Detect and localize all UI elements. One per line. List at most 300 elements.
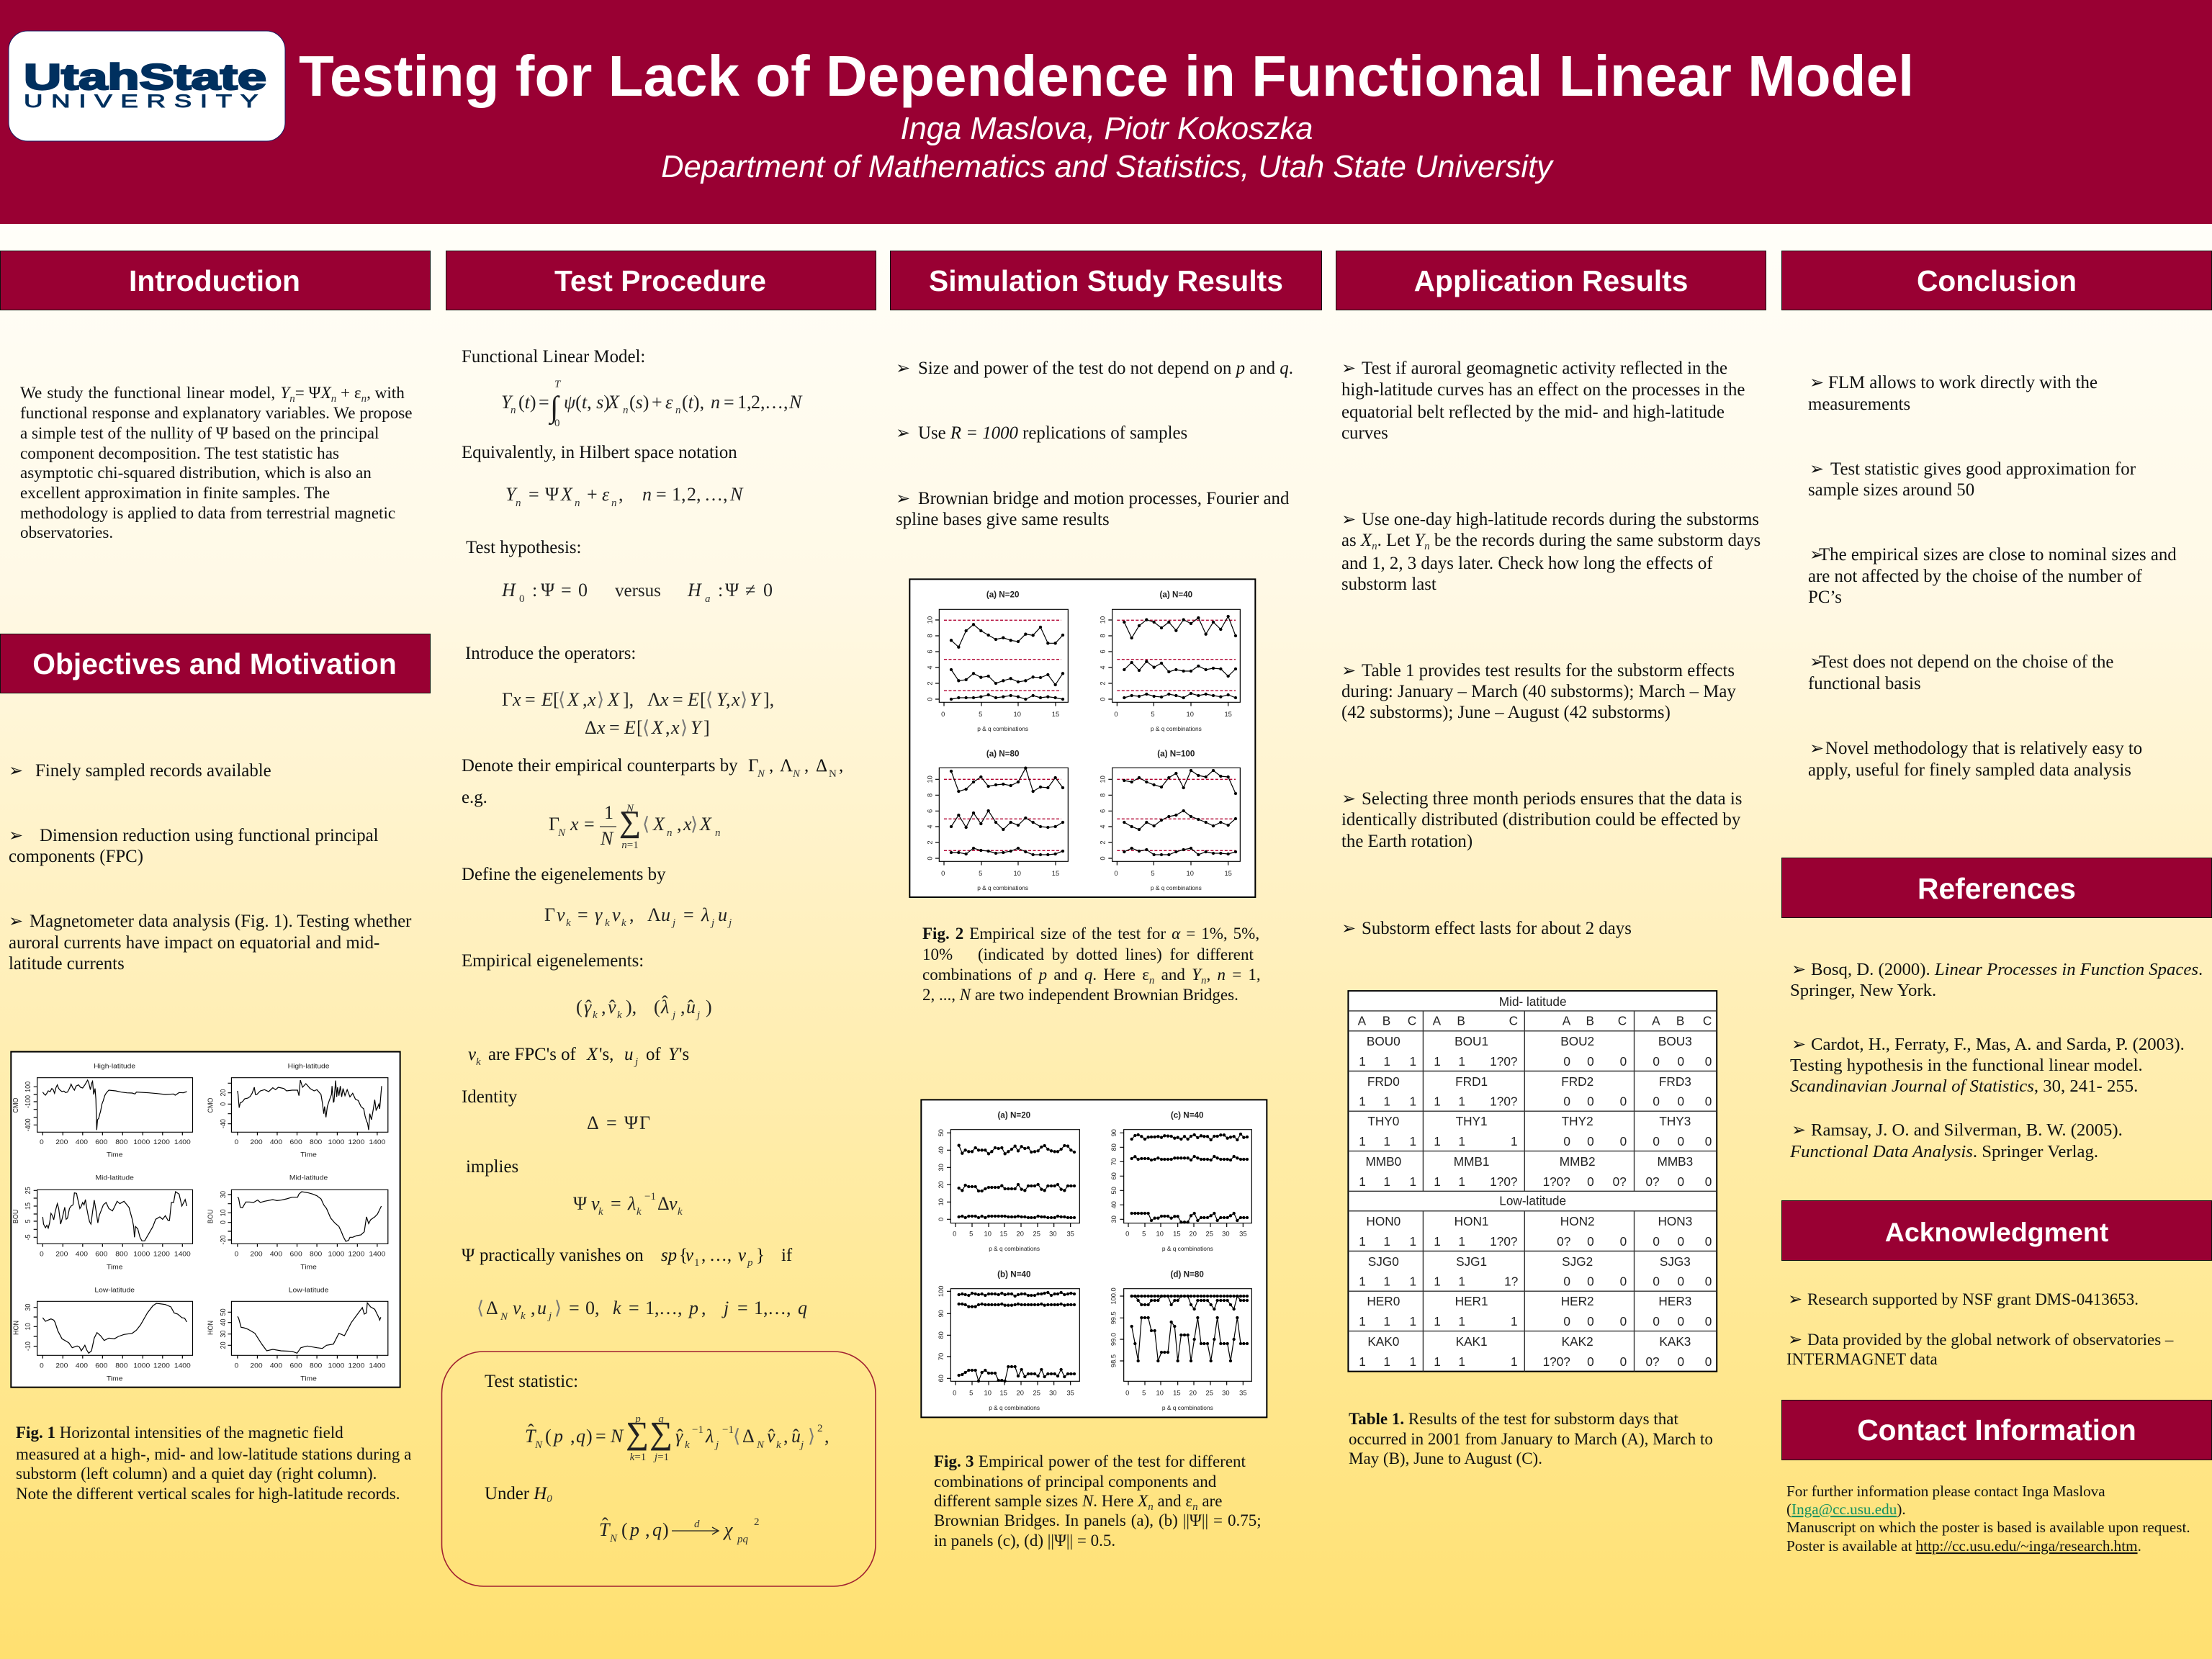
bullet list: application findings: the Earth rotation) xyxy=(1341,832,1473,851)
formula: integral model: ( xyxy=(682,392,688,413)
text: empirical counterparts: N xyxy=(829,768,837,780)
text: FPC definition: u xyxy=(624,1045,633,1064)
plot: high-latitude quiet day: -40 xyxy=(219,1119,228,1128)
plot: d N=80: 5 xyxy=(1142,1390,1146,1397)
formula: empirical eigenelements: λ xyxy=(660,997,669,1017)
formula: operators: , xyxy=(665,717,670,738)
bullet list: conclusions: ➢ xyxy=(1809,372,1824,392)
table 1: test results: MMB0 xyxy=(1365,1154,1401,1169)
formula: hypotheses: Ψ xyxy=(725,580,739,601)
table 1: test results: KAK3 xyxy=(1659,1334,1691,1349)
formula: eigen equations: = xyxy=(683,904,694,925)
text: e.g.: e.g. xyxy=(462,788,487,807)
table 1: test results: 1 xyxy=(1458,1174,1465,1189)
heading: References: References xyxy=(1917,872,2076,905)
text: implies: implies xyxy=(466,1157,518,1177)
formula: identity: Γ xyxy=(639,1112,650,1133)
plot: N=20: 10 xyxy=(926,616,933,624)
plot: N=100: 5 xyxy=(1151,870,1155,877)
formula: empirical covariance: N xyxy=(600,828,614,849)
plot: high-latitude substorm: 1200 xyxy=(153,1139,170,1146)
plot: N=40: 5 xyxy=(1151,711,1155,718)
plot: high-latitude quiet day xyxy=(207,1063,388,1159)
formula: inner product zero: …, xyxy=(768,1298,791,1318)
logo: Utah State University: UNIVERSITY xyxy=(24,91,266,112)
bullet list: application findings: ➢ xyxy=(1341,788,1356,809)
table 1: test results: FRD0 xyxy=(1367,1074,1400,1089)
table 1: test results: HER2 xyxy=(1561,1294,1594,1308)
plot: mid-latitude quiet day: 0 xyxy=(219,1220,228,1224)
plot: N=40: 8 xyxy=(1099,634,1106,638)
text: empirical counterparts: , xyxy=(769,756,773,775)
table 1: test results: SJG3 xyxy=(1660,1254,1691,1269)
formula: limit distribution: ˆ xyxy=(602,1514,608,1535)
plot: low-latitude quiet day: 800 xyxy=(310,1362,322,1370)
text: vanishing condition: practically vanishes on xyxy=(480,1246,644,1265)
caption: figure 3: and ε xyxy=(1154,1492,1192,1510)
plot: high-latitude quiet day: 20 xyxy=(219,1089,228,1097)
plot: high-latitude quiet day: 1200 xyxy=(348,1139,364,1146)
figure 1: magnetic field curves xyxy=(11,1052,400,1388)
formula: empirical eigenelements: ˆ xyxy=(688,997,694,1017)
plot: high-latitude quiet day: 1000 xyxy=(328,1139,344,1146)
formula: operator model: …, xyxy=(704,484,727,505)
plot: N=20: 0 xyxy=(926,697,933,701)
formula: operators: ⟩ xyxy=(597,689,604,710)
table 1: test results: 1 xyxy=(1434,1174,1441,1189)
formula: empirical eigenelements: u xyxy=(686,997,696,1017)
formula: inner product zero: , xyxy=(701,1298,706,1318)
formula: operator model: 2, xyxy=(687,484,701,505)
formula: operator model: n xyxy=(516,498,521,509)
formula: hypotheses: 0 xyxy=(763,580,773,601)
text: FPC definition: v xyxy=(468,1045,477,1064)
bullet list: simulation findings: Brownian bridge and motion processes, Fourier and xyxy=(918,489,1290,508)
plot: high-latitude quiet day: High-latitude xyxy=(288,1063,330,1070)
heading: Application Results xyxy=(1336,251,1766,310)
plot: low-latitude substorm: 800 xyxy=(115,1362,127,1370)
bullet list: objectives: latitude currents xyxy=(9,954,125,974)
table 1: test results: 1 xyxy=(1359,1054,1366,1069)
bullet list: conclusions: ➢ xyxy=(1809,459,1824,479)
bullet list: application findings: curves xyxy=(1341,423,1388,443)
formula: operators: ], xyxy=(763,689,774,710)
plot: mid-latitude substorm: 200 xyxy=(55,1251,68,1258)
logo: Utah State University: UtahState xyxy=(24,57,266,97)
plot: c N=40: (c) N=40 xyxy=(1171,1111,1204,1120)
bullet list: conclusions: sample sizes around 50 xyxy=(1808,480,1974,500)
caption: figure 2: n xyxy=(1201,975,1206,986)
formula: empirical covariance xyxy=(549,802,720,851)
heading: Objectives and Motivation xyxy=(0,634,431,693)
table 1: test results: FRD3 xyxy=(1659,1074,1691,1089)
table 1: test results: 0 xyxy=(1620,1134,1627,1148)
text: empirical counterparts: , xyxy=(804,756,809,775)
formula: empirical eigenelements: ( xyxy=(654,997,660,1017)
text: vanishing condition: , xyxy=(701,1246,706,1265)
text: introduction paragraph: = Ψ xyxy=(295,384,322,403)
formula: test statistic: −1 xyxy=(692,1424,703,1436)
formula: empirical covariance: ⟩ xyxy=(691,814,698,835)
plot: N=40: 15 xyxy=(1224,711,1232,718)
formula: empirical eigenelements: ) xyxy=(706,997,712,1017)
bullet list: objectives: Finely sampled records available xyxy=(35,761,271,781)
plot: N=20: 0 xyxy=(941,711,945,718)
formula: test statistic: ˆ xyxy=(768,1426,775,1447)
panel: Acknowledgment xyxy=(1781,1201,2212,1368)
text: empirical counterparts: N xyxy=(757,768,765,780)
formula: empirical eigenelements: , xyxy=(680,997,685,1017)
formula: test statistic: ⟩ xyxy=(808,1426,815,1447)
formula: operators: x xyxy=(731,689,740,710)
plot: a N=20: 0 xyxy=(953,1231,956,1238)
plot: c N=40: 30 xyxy=(1110,1215,1118,1223)
formula: test statistic: −1 xyxy=(722,1424,734,1436)
formula: inner product zero: k xyxy=(521,1310,526,1322)
formula: test statistic: j=1 xyxy=(653,1452,669,1463)
text: introduction paragraph: functional response and explanatory variables. We propose xyxy=(20,404,413,423)
caption: table 1: May (B), June to August (C). xyxy=(1349,1449,1542,1467)
text: contact details: http://cc.usu.edu/~inga/research.htm. xyxy=(1916,1537,2141,1555)
plot: mid-latitude substorm: -5 xyxy=(24,1234,32,1240)
table 1: test results: THY0 xyxy=(1367,1114,1400,1128)
caption: figure 2: n = 1, xyxy=(1217,966,1261,984)
text: introduction paragraph: We study the functional linear model, xyxy=(20,384,280,403)
bullet list: application findings: Selecting three month periods ensures that the data is xyxy=(1362,789,1742,809)
caption: figure 1: Horizontal intensities of the magnetic field xyxy=(60,1424,343,1442)
plot: b N=40: 0 xyxy=(953,1390,956,1397)
table 1: test results: SJG0 xyxy=(1368,1254,1399,1269)
table 1: test results: 0 xyxy=(1678,1134,1684,1148)
bullet list: acknowledgments: Data provided by the global network of observatories – xyxy=(1807,1331,2174,1349)
plot: low-latitude quiet day: 40 xyxy=(219,1319,228,1326)
plot: mid-latitude substorm: Time xyxy=(107,1264,122,1271)
text: under H0: 0 xyxy=(547,1493,552,1505)
table 1: test results: Low-latitude xyxy=(1499,1193,1566,1208)
plot: N=40: p & q combinations xyxy=(1151,725,1202,732)
plot: c N=40: 20 xyxy=(1190,1231,1197,1238)
table 1: test results: 0? xyxy=(1645,1354,1660,1369)
caption: figure 3: different sample sizes xyxy=(934,1492,1082,1510)
formula: operators: Y xyxy=(716,689,729,710)
table 1: test results: 0 xyxy=(1705,1354,1712,1369)
formula: test statistic: , xyxy=(783,1426,788,1447)
plot: N=20: 6 xyxy=(926,649,933,654)
formula: hypotheses: H xyxy=(687,580,702,601)
plot: high-latitude substorm: -400 xyxy=(24,1118,32,1131)
formula: operators: Λ xyxy=(647,689,661,710)
table 1: test results: 1 xyxy=(1383,1054,1390,1069)
bullet list: objectives: Dimension reduction using functional principal xyxy=(40,826,379,845)
plot: a N=20: (a) N=20 xyxy=(997,1111,1030,1120)
plot: N=20: 4 xyxy=(926,665,933,670)
plot: c N=40: 35 xyxy=(1239,1231,1247,1238)
table 1: test results: 0 xyxy=(1705,1234,1712,1249)
text: vanishing condition: Ψ xyxy=(462,1246,475,1265)
formula: implied relation: k xyxy=(598,1206,603,1218)
formula: empirical eigenelements: ˆ xyxy=(662,992,668,1013)
plot: d N=80: 99.5 xyxy=(1110,1311,1117,1324)
formula: operators: = xyxy=(609,717,620,738)
panel: Test Procedure xyxy=(442,251,876,1586)
caption: table 1: occurred in 2001 from January to March (A), March to xyxy=(1349,1430,1713,1448)
formula: limit distribution: , xyxy=(645,1519,649,1540)
formula: empirical eigenelements: ), xyxy=(626,997,637,1017)
bullet list: application findings: ➢ xyxy=(1341,660,1356,680)
table 1: test results: 0 xyxy=(1653,1274,1660,1289)
text: under H0: Under xyxy=(485,1484,534,1503)
formula: test statistic: = xyxy=(595,1426,606,1447)
formula: hypotheses: a xyxy=(705,593,710,605)
panel: Conclusion xyxy=(1781,251,2212,780)
formula: hypotheses: : xyxy=(718,580,723,601)
plot: low-latitude substorm: 1400 xyxy=(174,1362,191,1370)
table 1: test results: 0 xyxy=(1653,1234,1660,1249)
plot: N=40: 6 xyxy=(1099,649,1106,654)
table 1: test results: 0 xyxy=(1678,1174,1684,1189)
table 1: test results: 1 xyxy=(1383,1134,1390,1148)
table 1: test results: C xyxy=(1509,1013,1518,1028)
bullet list: application findings: as xyxy=(1341,531,1361,550)
plot: mid-latitude quiet day: BOU xyxy=(207,1210,215,1223)
plot: c N=40: p & q combinations xyxy=(1162,1245,1213,1252)
plot: c N=40: 0 xyxy=(1125,1231,1129,1238)
table 1: test results: 1 xyxy=(1359,1274,1366,1289)
caption: figure 3: n xyxy=(1192,1501,1198,1513)
caption: figure 1: Note the different vertical scales for high-latitude records. xyxy=(16,1485,400,1503)
table 1: test results: FRD2 xyxy=(1561,1074,1593,1089)
formula: operators: Δ xyxy=(585,717,597,738)
plot: N=20: 5 xyxy=(979,711,982,718)
text: empirical counterparts: Λ xyxy=(780,756,793,775)
formula: eigen equations: u xyxy=(718,904,727,925)
table 1: test results: 1 xyxy=(1434,1314,1441,1328)
formula: hypotheses: 0 xyxy=(519,593,524,605)
table 1: test results: 1?0? xyxy=(1490,1174,1518,1189)
formula: empirical eigenelements: ( xyxy=(576,997,583,1017)
table 1: test results: 1 xyxy=(1359,1094,1366,1109)
table 1: test results: HON0 xyxy=(1366,1214,1401,1228)
plot: N=80 xyxy=(926,749,1068,891)
text: empirical counterparts: N xyxy=(792,768,801,780)
table 1: test results: 1 xyxy=(1359,1354,1366,1369)
formula: test statistic: γ xyxy=(675,1426,683,1447)
heading: Simulation Study Results xyxy=(890,251,1322,310)
caption: figure 2: n xyxy=(1149,975,1154,986)
text: test hypothesis: Test hypothesis: xyxy=(466,538,581,557)
plot: mid-latitude quiet day: Time xyxy=(300,1264,317,1271)
table 1: test results: BOU3 xyxy=(1658,1034,1692,1048)
formula: test statistic: ( xyxy=(545,1426,552,1447)
plot: c N=40: 70 xyxy=(1110,1158,1118,1166)
plot: N=80: 10 xyxy=(1014,870,1021,877)
caption: figure 3: N. Here X xyxy=(1082,1492,1148,1510)
formula: integral model: X xyxy=(607,392,620,413)
formula: operator model: Ψ xyxy=(545,484,559,505)
table 1: test results: 0 xyxy=(1678,1234,1684,1249)
plot: high-latitude quiet day: 400 xyxy=(270,1139,282,1146)
plot: N=20 xyxy=(926,590,1068,732)
formula: empirical covariance: ∑ xyxy=(619,806,641,839)
plot: low-latitude quiet day: 20 xyxy=(219,1341,228,1349)
formula: empirical covariance: = xyxy=(584,814,595,835)
table 1: test results: 0 xyxy=(1620,1274,1627,1289)
plot: low-latitude quiet day: 400 xyxy=(270,1362,282,1370)
plot: b N=40: 90 xyxy=(938,1310,945,1318)
table 1: test results: BOU1 xyxy=(1455,1034,1488,1048)
plot: mid-latitude substorm: 1000 xyxy=(133,1251,150,1258)
reference list: Ramsay, J. O. and Silverman, B. W. (2005). xyxy=(1811,1120,2123,1140)
formula: test statistic: k xyxy=(685,1439,690,1451)
formula: test statistic: q xyxy=(576,1426,585,1447)
table 1: test results: A xyxy=(1433,1013,1441,1028)
formula: operators: x xyxy=(512,689,521,710)
heading: Contact Information: Contact Information xyxy=(1857,1413,2136,1447)
text: introduction paragraph: component decomposition. The test statistic has xyxy=(20,444,339,463)
formula: inner product zero: , xyxy=(531,1298,536,1318)
plot: mid-latitude substorm: 800 xyxy=(115,1251,127,1258)
table 1: test results: 0 xyxy=(1705,1094,1712,1109)
table 1: test results: A xyxy=(1652,1013,1660,1028)
plot: d N=80: 25 xyxy=(1206,1390,1213,1397)
formula: integral model: n xyxy=(675,405,681,416)
plot: low-latitude substorm: 600 xyxy=(95,1362,108,1370)
formula: operator model: n xyxy=(575,498,580,509)
formula: operator model: X xyxy=(560,484,573,505)
plot: d N=80: 30 xyxy=(1222,1390,1230,1397)
table 1: test results: B xyxy=(1457,1013,1465,1028)
plot: a N=20: 0 xyxy=(938,1218,945,1221)
plot: mid-latitude quiet day: 1200 xyxy=(348,1251,364,1258)
text: vanishing condition: v xyxy=(738,1246,747,1265)
plot: high-latitude substorm: 600 xyxy=(95,1139,108,1146)
formula: limit distribution: χ xyxy=(722,1519,733,1540)
plot: d N=80: 98.5 xyxy=(1110,1354,1117,1367)
text: introduction paragraph: asymptotic chi-squared distribution, which is also an xyxy=(20,464,372,482)
formula: test statistic: , xyxy=(824,1426,830,1447)
formula: empirical eigenelements: j xyxy=(671,1010,675,1021)
reference list: Bosq, D. (2000). xyxy=(1811,960,1935,979)
table 1: test results: 1 xyxy=(1410,1314,1416,1328)
plot: N=40: 4 xyxy=(1099,665,1106,670)
plot: b N=40: 60 xyxy=(938,1375,945,1382)
bullet list: application findings: n xyxy=(1424,541,1430,552)
table 1: test results: 1 xyxy=(1458,1354,1465,1369)
plot: mid-latitude substorm: 5 xyxy=(24,1219,32,1223)
table 1: test results: THY1 xyxy=(1456,1114,1488,1128)
table 1: test results: HON1 xyxy=(1455,1214,1489,1228)
formula: integral model: N xyxy=(788,392,803,413)
table 1: test results: 1 xyxy=(1434,1234,1441,1249)
plot: a N=20: 50 xyxy=(938,1129,945,1137)
formula: limit distribution xyxy=(599,1514,759,1545)
plot: low-latitude substorm: 30 xyxy=(24,1304,32,1311)
table 1: test results: HER0 xyxy=(1367,1294,1401,1308)
plot: a N=20: 25 xyxy=(1033,1231,1040,1238)
formula: inner product zero: 1, xyxy=(645,1298,660,1318)
bullet list: conclusions: apply, useful for finely sampled data analysis xyxy=(1808,760,2131,780)
table 1: test results: 0 xyxy=(1678,1314,1684,1328)
table 1: test results: 0 xyxy=(1587,1234,1594,1249)
heading: Simulation Study Results: Simulation Study Results xyxy=(929,264,1283,297)
formula: integral model: n xyxy=(711,392,720,413)
plot: d N=80: 0 xyxy=(1125,1390,1129,1397)
formula: integral model: 0 xyxy=(554,418,560,429)
formula: test statistic: ∑ xyxy=(626,1416,649,1451)
table 1: test results: HER1 xyxy=(1455,1294,1488,1308)
plot: mid-latitude substorm: 400 xyxy=(76,1251,88,1258)
formula: inner product zero: N xyxy=(500,1311,508,1323)
table 1: test results: MMB3 xyxy=(1658,1154,1693,1169)
heading: Application Results: Application Results xyxy=(1414,264,1688,297)
text: introduction paragraph: excellent approximation in finite samples. The xyxy=(20,484,330,503)
bullet list: application findings: Table 1 provides test results for the substorm effects xyxy=(1362,661,1735,680)
plot: high-latitude substorm: -100 xyxy=(24,1095,32,1108)
bullet list: simulation findings: p and q. xyxy=(1236,359,1293,378)
panel: Application Results xyxy=(1336,251,1766,1467)
plot: N=100: 0 xyxy=(1099,856,1106,860)
formula: operators: ⟨ xyxy=(642,717,649,738)
formula: test statistic: ⟨ xyxy=(733,1426,740,1447)
formula: hypotheses: Ψ xyxy=(541,580,555,601)
formula: eigen equations: Λ xyxy=(647,904,661,925)
plot: N=100 xyxy=(1099,749,1240,891)
text: introduce the operators: Introduce the operators: xyxy=(465,644,636,663)
figure 2: empirical size plots xyxy=(909,579,1255,897)
bullet list: acknowledgments: ➢ xyxy=(1788,1289,1802,1309)
bullet list: application findings: Use one-day high-latitude records during the substorms xyxy=(1362,510,1759,529)
plot: high-latitude quiet day: 0 xyxy=(219,1102,228,1106)
formula: hypotheses: H xyxy=(501,580,516,601)
formula: limit distribution: 2 xyxy=(754,1516,759,1528)
table 1: test results: HER3 xyxy=(1658,1294,1691,1308)
table 1: test results: 0 xyxy=(1587,1314,1594,1328)
formula: operators: ⟩ xyxy=(740,689,747,710)
table 1: test results: 0 xyxy=(1587,1174,1594,1189)
table 1: test results: 1 xyxy=(1359,1314,1366,1328)
plot: N=100: (a) N=100 xyxy=(1157,749,1195,758)
formula: test statistic: q xyxy=(658,1413,664,1425)
text: FPC definition: j xyxy=(634,1056,638,1068)
plot: c N=40: 25 xyxy=(1206,1231,1213,1238)
text: empirical counterparts: Γ xyxy=(748,756,758,775)
callout: test statistic box xyxy=(442,1352,876,1586)
plot: mid-latitude substorm: 1400 xyxy=(174,1251,191,1258)
plot: a N=20: 10 xyxy=(984,1231,992,1238)
reference list: Linear Processes in Function Spaces. xyxy=(1935,960,2203,979)
plot: mid-latitude substorm xyxy=(12,1174,192,1271)
plot: mid-latitude substorm: 0 xyxy=(40,1251,44,1258)
reference list: ➢ xyxy=(1791,1034,1806,1054)
plot: N=80: 6 xyxy=(926,809,933,813)
table 1: test results: 0 xyxy=(1587,1094,1594,1109)
formula: operators: [ xyxy=(553,689,559,710)
formula: identity: Ψ xyxy=(624,1112,639,1133)
formula: limit distribution: q xyxy=(652,1519,662,1540)
heading: Contact Information xyxy=(1781,1400,2212,1460)
formula: operators: E xyxy=(687,689,699,710)
bullet list: conclusions: functional basis xyxy=(1808,674,1921,693)
plot: mid-latitude substorm: BOU xyxy=(12,1210,20,1223)
formula: test statistic: ) xyxy=(586,1426,593,1447)
formula: test statistic: N xyxy=(610,1426,624,1447)
formula: eigen equations: j xyxy=(727,917,732,929)
table 1: test results: B xyxy=(1382,1013,1390,1028)
formula: limit distribution: d xyxy=(694,1519,700,1530)
formula: test statistic: 2 xyxy=(817,1423,822,1434)
plot: low-latitude substorm: 1000 xyxy=(133,1362,150,1370)
plot: N=100: 10 xyxy=(1099,775,1106,783)
